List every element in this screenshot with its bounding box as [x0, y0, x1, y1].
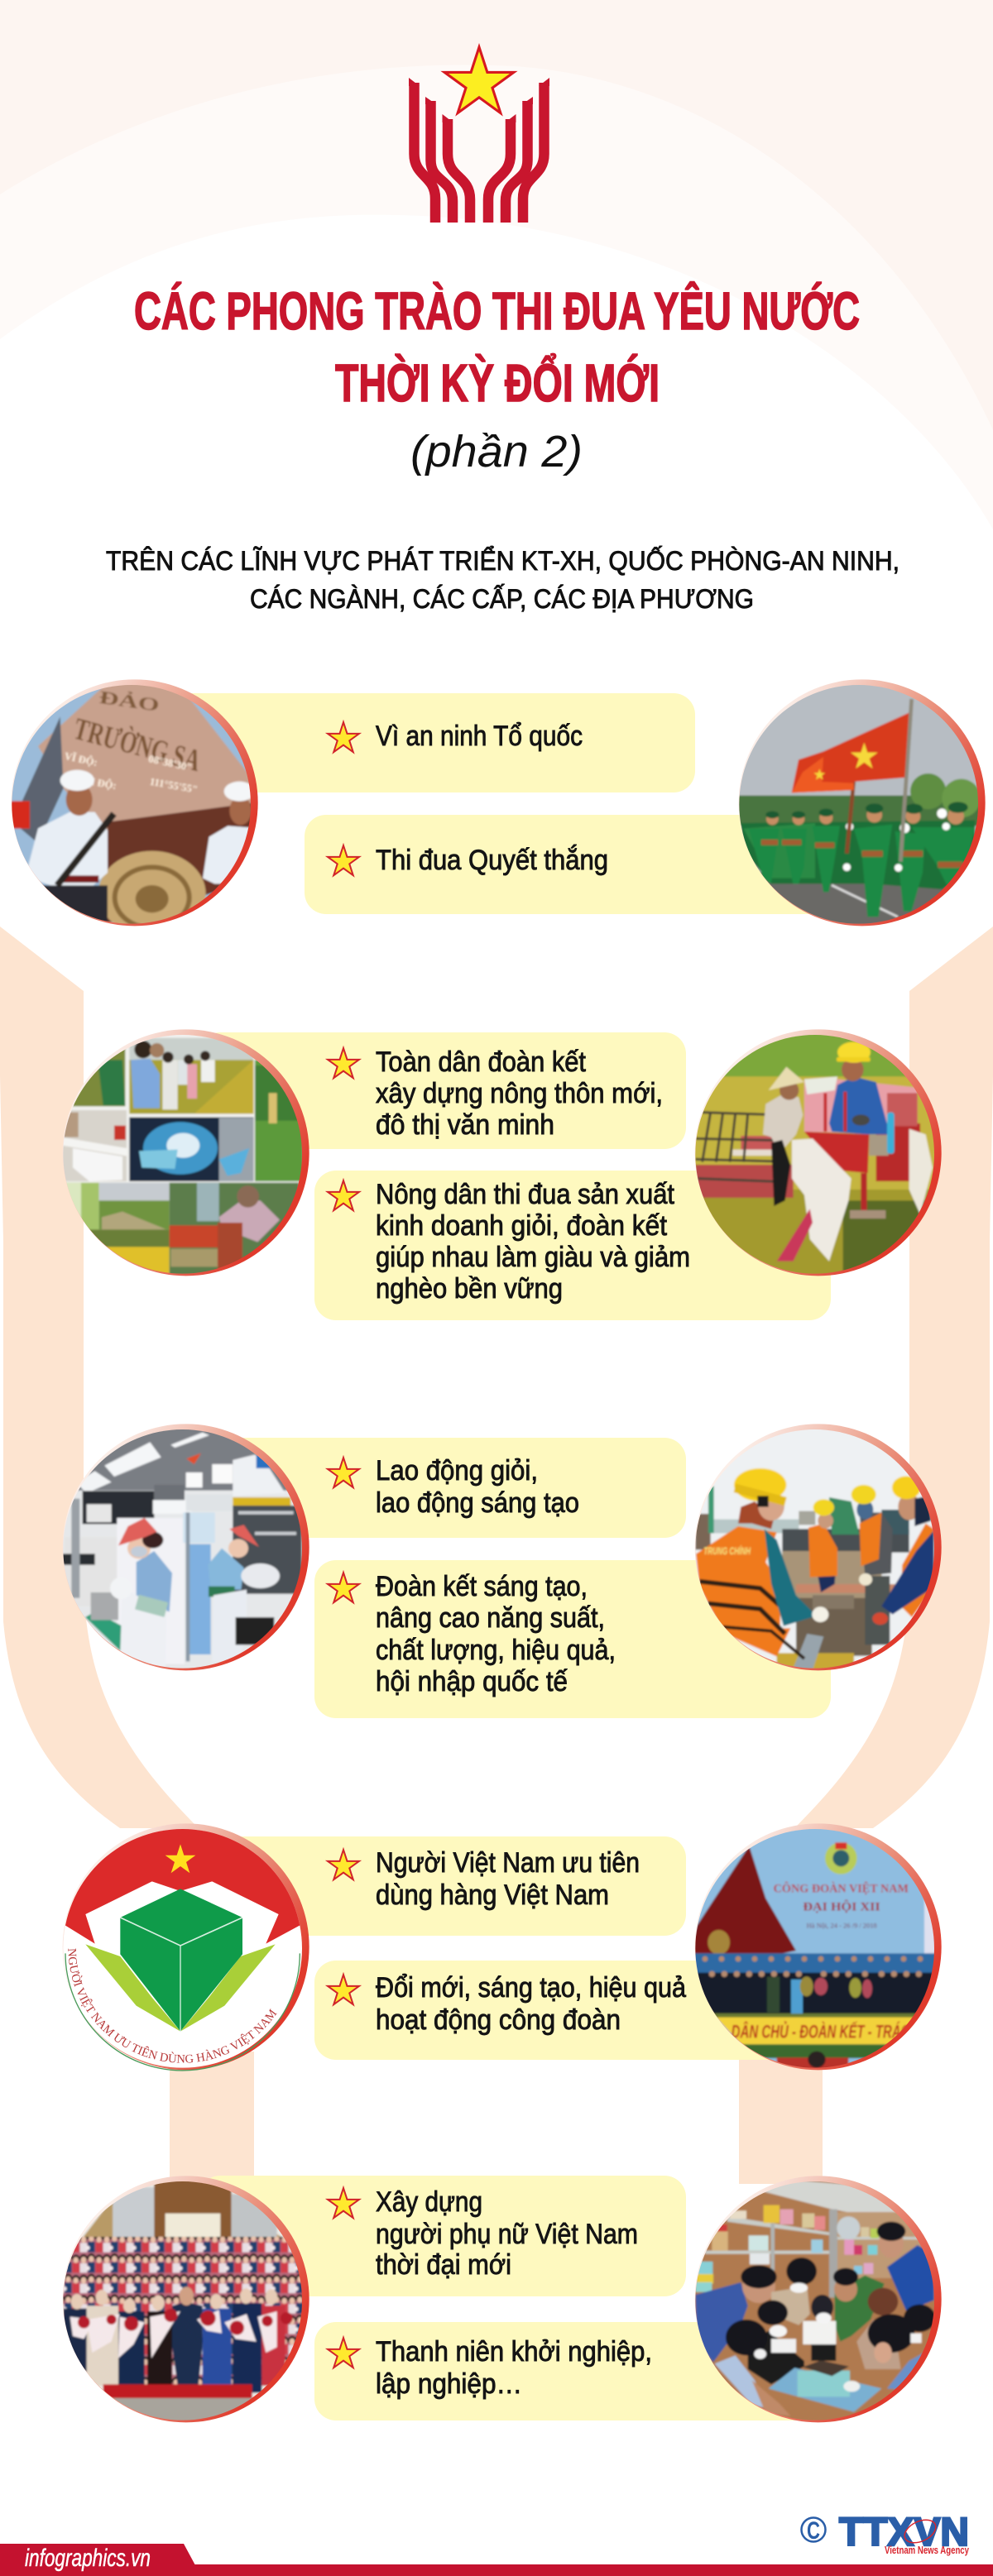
footer bar [0, 2544, 993, 2576]
photo: construction workers: TRUNG CHÍNH [703, 1544, 751, 1557]
decorative peach bands [0, 926, 993, 2184]
item: Đổi mới, sáng tạo [328, 1972, 686, 2036]
photo: rural collage [56, 1024, 314, 1282]
section 5: women and youth [56, 2171, 947, 2429]
item: Lao động giỏi: lao động sáng tạo [376, 1487, 579, 1519]
section 2: rural development [56, 1024, 947, 1320]
logo: Người Việt Nam ưu tiên dùng hàng Việt Nam: NGƯỜI VIỆT NAM ƯU TIÊN DÙNG HÀNG VIỆT NAM [68, 1948, 277, 2063]
photo: youth startup group [688, 2171, 947, 2429]
subtitle: phần 2: (phần 2) [410, 427, 583, 476]
logo: TTXVN copyright: TTXVN [839, 2511, 969, 2554]
footer bar: infographics.vn [25, 2545, 151, 2572]
item: Xây dựng người phụ nữ: thời đại mới [376, 2249, 511, 2281]
section 4: Vietnamese goods and trade unions [63, 1823, 942, 2071]
emblem: star over hands [409, 47, 549, 223]
item: Người Việt Nam ưu tiên: dùng hàng Việt Nam [376, 1879, 609, 1911]
section 1: security and defence [5, 674, 991, 936]
item: Đổi mới, sáng tạo: Đổi mới, sáng tạo, hiệu quả [376, 1972, 686, 2004]
logo: TTXVN copyright: C [807, 2517, 820, 2545]
photo: Truong Sa sailors: 111°55'55" [149, 776, 199, 796]
photo: rice harvester [688, 1024, 947, 1282]
item: Toàn dân đoàn kết [328, 1046, 663, 1141]
item: Đoàn kết sáng tạo: nâng cao năng suất, [376, 1602, 605, 1634]
photo: trade union congress: Hà Nội, 24 - 26 /9 / 2018 [807, 1922, 877, 1929]
photo: parade with flag [732, 674, 991, 932]
item: Nông dân thi đua: kinh doanh giỏi, đoàn kết [376, 1210, 668, 1242]
title [134, 280, 860, 413]
item: Xây dựng người phụ nữ: Xây dựng [376, 2186, 482, 2218]
item: Nông dân thi đua: Nông dân thi đua sản xuất [376, 1179, 674, 1210]
item: Xây dựng người phụ nữ: người phụ nữ Việt Nam [376, 2219, 638, 2250]
item: Toàn dân đoàn kết: xây dựng nông thôn mới, [376, 1078, 663, 1109]
item: Lao động giỏi [328, 1455, 579, 1519]
item: Xây dựng người phụ nữ [328, 2186, 638, 2281]
photo: trade union congress: CÔNG ĐOÀN VIỆT NAM [774, 1881, 909, 1895]
item: Đoàn kết sáng tạo: Đoàn kết sáng tạo, [376, 1571, 588, 1602]
item: Người Việt Nam ưu tiên: Người Việt Nam ưu tiên [376, 1847, 640, 1879]
photo: women group with bouquets [56, 2171, 314, 2429]
logo: Người Việt Nam ưu tiên dùng hàng Việt Nam [63, 1823, 309, 2071]
item: Thanh niên khởi nghiệp [328, 2336, 652, 2400]
item: Toàn dân đoàn kết: Toàn dân đoàn kết [376, 1046, 586, 1078]
photo: Truong Sa sailors: TRƯỜNG SA [70, 711, 204, 778]
intro text: TRÊN CÁC LĨNH VỰC PHÁT TRIỂN KT-XH, QUỐC PHÒNG-AN NINH, [106, 546, 899, 576]
background arcs [0, 0, 993, 662]
item: Đổi mới, sáng tạo: hoạt động công đoàn [376, 2004, 621, 2036]
photo: construction workers [688, 1419, 947, 1677]
title: THỜI KỲ ĐỔI MỚI [335, 352, 660, 413]
item: Đoàn kết sáng tạo: chất lượng, hiệu quả, [376, 1635, 616, 1666]
photo: Truong Sa sailors: KINH ĐỘ: [66, 772, 118, 792]
item: Đoàn kết sáng tạo [328, 1571, 616, 1697]
photo: trade union congress [688, 1818, 947, 2076]
photo: Truong Sa sailors: 08°38'30" [147, 753, 193, 773]
item: Nông dân thi đua: giúp nhau làm giàu và giảm [376, 1242, 690, 1273]
item: Thanh niên khởi nghiệp: lập nghiệp… [376, 2368, 522, 2400]
item: Thanh niên khởi nghiệp: Thanh niên khởi nghiệp, [376, 2336, 652, 2368]
photo: trade union congress: ĐẠI HỘI XII [803, 1899, 880, 1913]
item: Nông dân thi đua: nghèo bền vững [376, 1273, 563, 1305]
item: Thi đua Quyết thắng: Thi đua Quyết thắng [376, 845, 608, 876]
photo: factory workers [56, 1419, 314, 1677]
photo: Truong Sa sailors: ĐẢO [98, 687, 161, 716]
item: Vì an ninh Tổ quốc: Vì an ninh Tổ quốc [376, 721, 583, 752]
intro text [106, 546, 899, 614]
photo: Truong Sa sailors [5, 674, 263, 936]
item: Lao động giỏi: Lao động giỏi, [376, 1455, 538, 1487]
item: Đoàn kết sáng tạo: hội nhập quốc tế [376, 1666, 568, 1697]
section 3: labour [56, 1419, 947, 1718]
photo: Truong Sa sailors: VĨ ĐỘ: [64, 750, 98, 768]
intro text: CÁC NGÀNH, CÁC CẤP, CÁC ĐỊA PHƯƠNG [250, 584, 754, 614]
item: Toàn dân đoàn kết: đô thị văn minh [376, 1109, 554, 1141]
item: Nông dân thi đua [328, 1179, 690, 1305]
item: Người Việt Nam ưu tiên [328, 1847, 640, 1911]
